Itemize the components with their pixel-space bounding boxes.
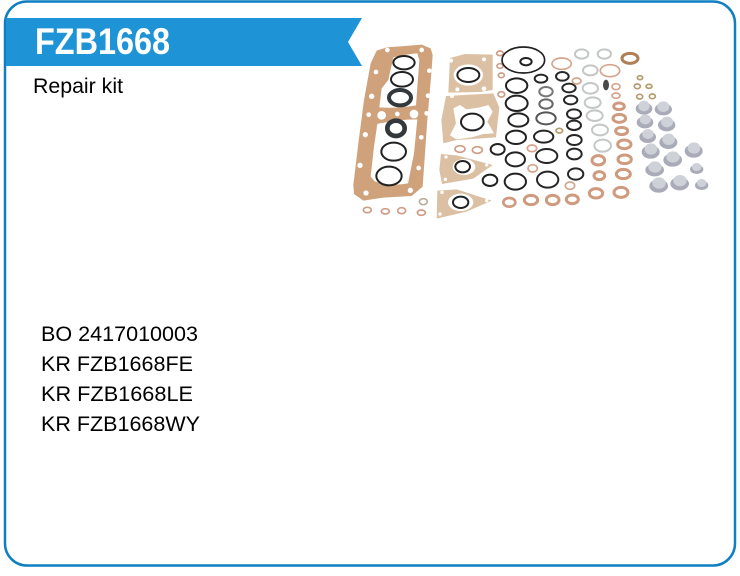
silver rings [575, 49, 611, 152]
thick bronze washer [622, 53, 638, 63]
gaskets and left rings [353, 45, 528, 219]
oil seals [387, 90, 411, 136]
text block: cross references [41, 323, 200, 436]
subtitle: product type: Repair kit [33, 75, 123, 98]
product photo: gaskets and seals [353, 45, 708, 219]
text block: cross references: KR FZB1668FE [41, 353, 193, 376]
title: part number: FZB1668 [35, 21, 170, 62]
copper washers [524, 103, 631, 205]
text block: cross references: KR FZB1668WY [41, 413, 200, 436]
plates [437, 54, 499, 219]
rings and plugs on the right [502, 47, 708, 205]
dark o-rings [534, 72, 583, 188]
large gasket [353, 45, 433, 201]
text block: cross references: KR FZB1668LE [41, 383, 193, 406]
small copper washers [363, 51, 515, 215]
woodruff key [603, 80, 609, 90]
copper rings [527, 58, 620, 189]
text block: cross references: BO 2417010003 [41, 323, 198, 346]
black o-rings [376, 56, 528, 208]
plastic plugs [636, 101, 708, 193]
brass small washers [556, 76, 655, 133]
banner: blue ribbon [6, 18, 362, 66]
large ring [502, 47, 545, 73]
